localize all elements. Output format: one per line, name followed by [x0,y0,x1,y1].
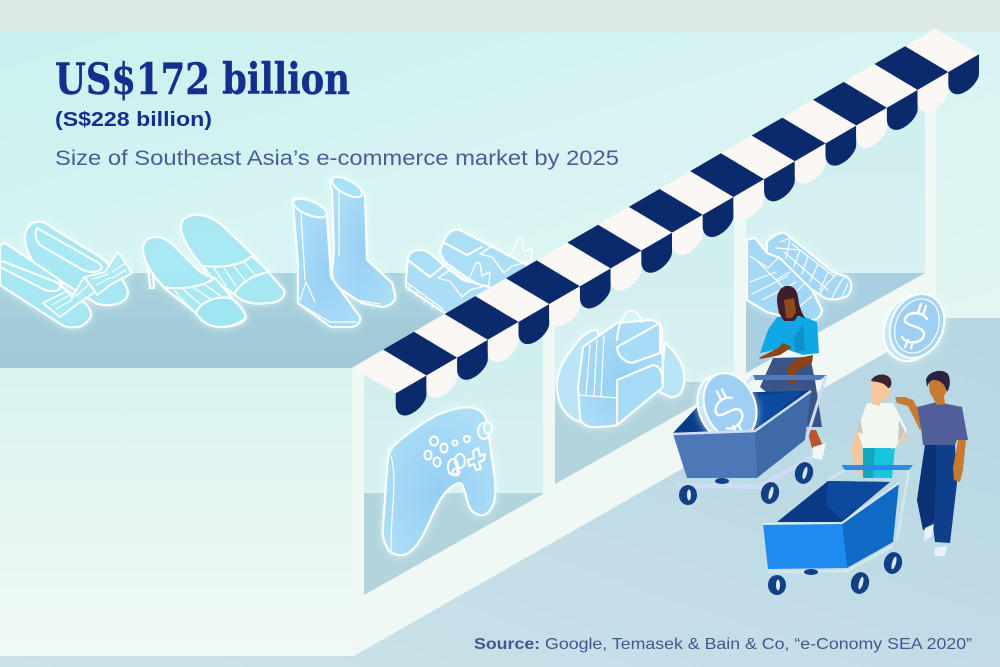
title: US$172 billion [55,55,350,105]
icon: coin in cart [688,365,766,449]
woman top [760,317,819,355]
icon: game controller [383,407,495,555]
cart faces [673,431,757,478]
source note: Source: Google, Temasek & Bain & Co, “e-Conomy SEA 2020” [474,636,972,653]
window 2 [555,180,734,484]
handle bar [753,375,827,380]
shirt [917,402,968,445]
woman arms [759,343,813,383]
shopping cart 1 [673,365,827,506]
shoes [924,524,947,556]
man with blue shirt [895,371,968,556]
cart wheels [679,460,816,506]
icon: ballet flats [0,222,132,327]
cart wheels [768,550,905,596]
cart interior [777,481,890,522]
man legs shorts [863,448,895,478]
handle bar [842,465,913,470]
caption: Size of Southeast Asia’s e-commerce market by 2025 [55,147,619,170]
awning scallops [396,54,979,416]
icon: boots [291,173,395,327]
back wall [0,31,1000,331]
display shelf floor [0,273,520,369]
man in white shirt [851,374,908,478]
man shirt [857,403,907,448]
awning [352,28,979,416]
window 1 [364,290,543,595]
left front panel [0,368,352,656]
icon: floating coin [874,285,954,370]
pants [917,445,957,543]
ground floor [0,318,1000,667]
man arms [851,425,908,476]
cart faces [763,523,847,569]
woman skirt and legs [760,357,822,427]
window 3 [746,72,925,373]
subheading: (S$228 billion) [55,109,212,131]
shopping cart 2 [763,465,913,596]
woman head and hair [777,286,805,321]
arms [895,397,966,482]
woman with cart [759,286,826,460]
icon: sneakers [747,233,851,321]
icon: bow loafers [406,230,540,320]
head [929,374,947,405]
shop front [352,30,936,657]
icon: heeled sandals [143,215,284,327]
man head [871,375,891,406]
top strip background [0,0,1000,31]
awning striped roof [352,28,979,393]
cart interior [673,390,812,433]
icon: backpack [557,311,684,427]
